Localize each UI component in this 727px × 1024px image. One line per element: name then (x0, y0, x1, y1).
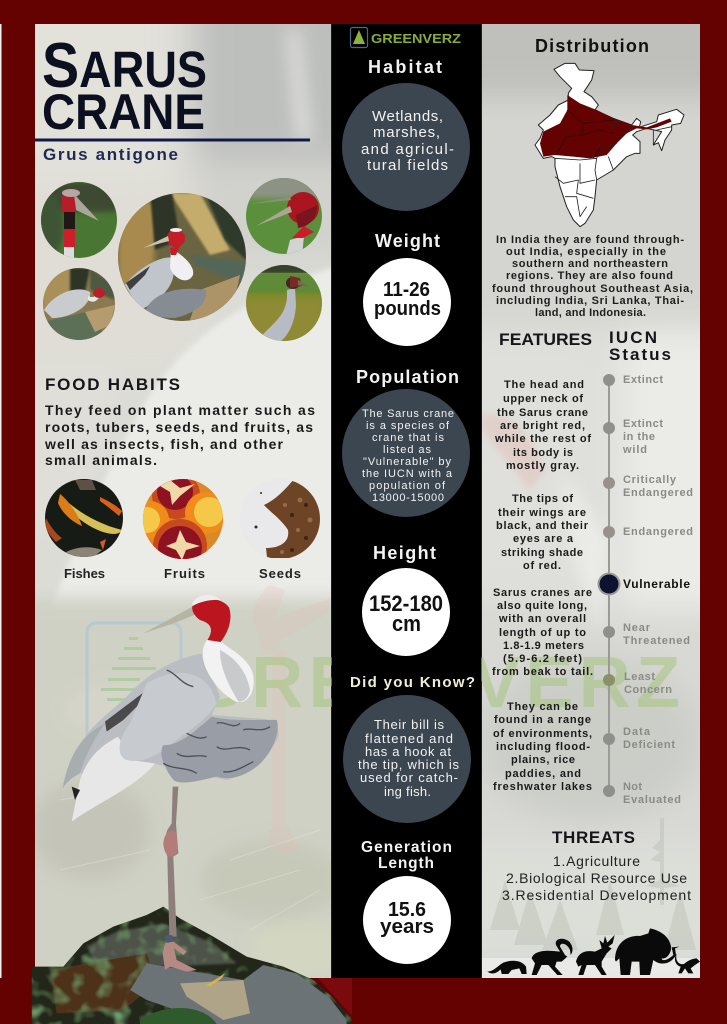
head (143, 595, 230, 642)
features text: with an overall (498, 613, 586, 625)
stat: population: 13000-15000 (372, 492, 444, 504)
features text: freshwater lakes (493, 781, 592, 793)
scientific name: Grus antigone (43, 145, 178, 164)
status labels: Endangered (623, 487, 693, 499)
features text: its body is (513, 447, 573, 459)
title (42, 31, 207, 140)
status labels: Extinct (623, 374, 663, 386)
stat: habitat (342, 57, 470, 211)
icon: wildlife silhouettes (487, 928, 700, 975)
photo: fishes (45, 479, 123, 560)
distribution text (492, 234, 693, 319)
stat: generation length: Generation (361, 839, 452, 856)
heading: IUCN status (609, 328, 671, 364)
ghost crane legs in background (259, 585, 285, 598)
distribution text: including India, Sri Lanka, Thai- (496, 295, 684, 307)
features text: their wings are (498, 507, 586, 519)
heading: features: FEATURES (499, 330, 592, 349)
photo: crane head portrait (36, 182, 117, 259)
panel: centre stats (342, 28, 475, 964)
status labels (622, 374, 693, 806)
callout: did you know: Did you Know? (350, 674, 475, 691)
food habits text: well as insects, fish, and other (44, 436, 284, 452)
food habits text: roots, tubers, seeds, and fruits, as (45, 419, 313, 435)
features text: eyes are a (513, 533, 574, 545)
panel: central black column (332, 24, 481, 978)
stat: habitat: and agricul- (361, 141, 454, 158)
features text: Sarus cranes are (493, 587, 592, 599)
distribution text: found throughout Southeast Asia, (492, 283, 693, 295)
heading: IUCN status: Status (609, 345, 671, 364)
illustration: main sarus crane on rock (30, 595, 353, 1024)
stat: height: 152-180 (369, 591, 443, 616)
status labels: Endangered (623, 526, 693, 538)
stat: habitat: tural fields (367, 157, 448, 174)
photo: crane on rocks (118, 193, 246, 321)
stat: habitat: marshes, (373, 124, 440, 141)
features text: plains, rice (511, 754, 575, 766)
callout: did you know: the tip, which is (358, 757, 460, 772)
photo: crane calling (246, 172, 322, 256)
threats list (502, 853, 691, 903)
food labels: Seeds (259, 566, 301, 581)
status labels: Threatened (623, 635, 690, 647)
maroon corner over the rock edge (318, 978, 352, 1016)
status labels: Least (624, 671, 655, 683)
callout: did you know: has a hook at (365, 744, 451, 759)
callout: did you know (343, 674, 475, 823)
background pine trees (490, 818, 696, 950)
status labels: Data (623, 726, 651, 738)
features text: of red. (523, 560, 561, 572)
threats list: 1.Agriculture (553, 853, 640, 869)
threats list: 3.Residential Development (502, 887, 691, 903)
stat: weight: pounds (374, 298, 441, 320)
features text: found in a range (494, 714, 591, 726)
callout: did you know: flattened and (365, 731, 453, 746)
map: India distribution (535, 63, 684, 227)
stat: generation length: years (380, 916, 434, 938)
distribution text: out India, especially in the (506, 246, 666, 258)
photo: crane in field (246, 265, 322, 345)
stat: population: The Sarus crane (362, 408, 454, 420)
features text: also quite long, (497, 600, 587, 612)
features text: mostly gray. (506, 460, 579, 472)
stat: generation length: Length (378, 855, 434, 872)
status labels: in the (623, 431, 655, 443)
panel: left photographic background (35, 24, 331, 978)
callout: did you know: ing fish. (384, 784, 431, 799)
features text: black, and their (496, 520, 589, 532)
stat: height (362, 543, 450, 656)
body and wings (63, 653, 279, 822)
stat: habitat: Habitat (368, 57, 442, 77)
stat: population: population of (369, 480, 446, 492)
icon: elephant (615, 928, 679, 975)
features text: from beak to tail. (492, 666, 593, 678)
title: CRANE (42, 84, 205, 140)
features text (492, 379, 593, 793)
status labels: Near (623, 622, 651, 634)
features text: are bright red, (500, 420, 585, 432)
features text: The tips of (512, 493, 573, 505)
photo: seeds (254, 481, 320, 558)
food habits text (44, 402, 315, 468)
distribution text: land, and Indonesia. (535, 307, 646, 319)
distribution text: In India they are found through- (496, 234, 684, 246)
section: threats: THREATS (552, 828, 635, 847)
food labels: Fruits (164, 566, 205, 581)
stat: population: is a species of (366, 420, 450, 432)
status labels: Deficient (623, 739, 675, 751)
features text: (5.9-6.2 feet) (503, 653, 582, 665)
photo: crane perched on rock (43, 268, 115, 340)
section: threats (502, 828, 691, 903)
stat: population: crane that is (372, 432, 444, 444)
stat: weight: Weight (375, 231, 440, 251)
callout: did you know: used for catch- (360, 770, 458, 785)
status labels: Evaluated (623, 794, 681, 806)
callout: did you know: Their bill is (374, 717, 444, 732)
features text: of environments, (493, 728, 592, 740)
stat: generation length: 15.6 (388, 899, 426, 921)
icon: ibex (532, 939, 573, 975)
logo: Greenverz (350, 28, 461, 48)
status labels: Not (623, 781, 642, 793)
logo: Greenverz: GREENVERZ (371, 31, 461, 46)
heading: food habits: FOOD HABITS (45, 375, 180, 394)
heading: distribution: Distribution (535, 36, 649, 56)
food labels: Fishes (64, 566, 105, 581)
stat: population (342, 367, 470, 517)
status dots (603, 374, 615, 797)
features text: striking shade (501, 547, 583, 559)
rock mound (30, 903, 353, 1024)
stat: population: "Vulnerable" by (363, 456, 452, 468)
stat: habitat: Wetlands, (372, 108, 443, 125)
stat: height: Height (373, 543, 436, 563)
title: SARUS (42, 31, 207, 101)
section: food habits (44, 375, 315, 468)
food habits text: small animals. (45, 452, 157, 468)
features text: including flood- (496, 741, 590, 753)
food labels (64, 566, 301, 581)
timeline: IUCN status (598, 374, 693, 806)
status labels: Critically (623, 474, 677, 486)
stat: population: listed as (383, 444, 432, 456)
icon: monkey (675, 953, 700, 973)
highlighted status: vulnerable: Vulnerable (623, 577, 690, 591)
distribution text: southern and northeastern (512, 258, 668, 270)
watermark: Greenverz logo (87, 623, 680, 743)
right panel background (482, 24, 700, 978)
stat: weight: 11-26 (383, 279, 430, 301)
legs (163, 787, 197, 972)
photo: fruits (143, 479, 223, 559)
food habits text: They feed on plant matter such as (45, 402, 315, 418)
stat: population: Population (356, 367, 459, 387)
icon: deer (576, 935, 615, 975)
stat: height: cm (392, 611, 421, 636)
features text: paddies, and (505, 768, 581, 780)
features text: while the rest of (494, 433, 591, 445)
watermark: Greenverz logo: GREENVERZ (190, 643, 680, 723)
highlighted status: vulnerable (598, 572, 690, 596)
status labels: Extinct (623, 418, 663, 430)
stat: generation length (361, 839, 452, 964)
status labels: wild (622, 444, 647, 456)
threats list: 2.Biological Resource Use (506, 870, 687, 886)
features text: They can be (507, 701, 578, 713)
status labels: Concern (624, 684, 672, 696)
features text: The head and (504, 379, 584, 391)
icon: marten (487, 961, 527, 974)
stat: weight (363, 231, 451, 346)
neck (203, 639, 254, 702)
features text: 1.8-1.9 meters (503, 640, 584, 652)
features text: the Sarus crane (497, 407, 588, 419)
distribution text: regions. They are also found (506, 270, 673, 282)
title rule (35, 138, 310, 142)
features text: upper neck of (503, 393, 583, 405)
heading: IUCN status: IUCN (609, 328, 657, 347)
stat: population: the IUCN with a (362, 468, 453, 480)
features text: length of up to (499, 627, 586, 639)
